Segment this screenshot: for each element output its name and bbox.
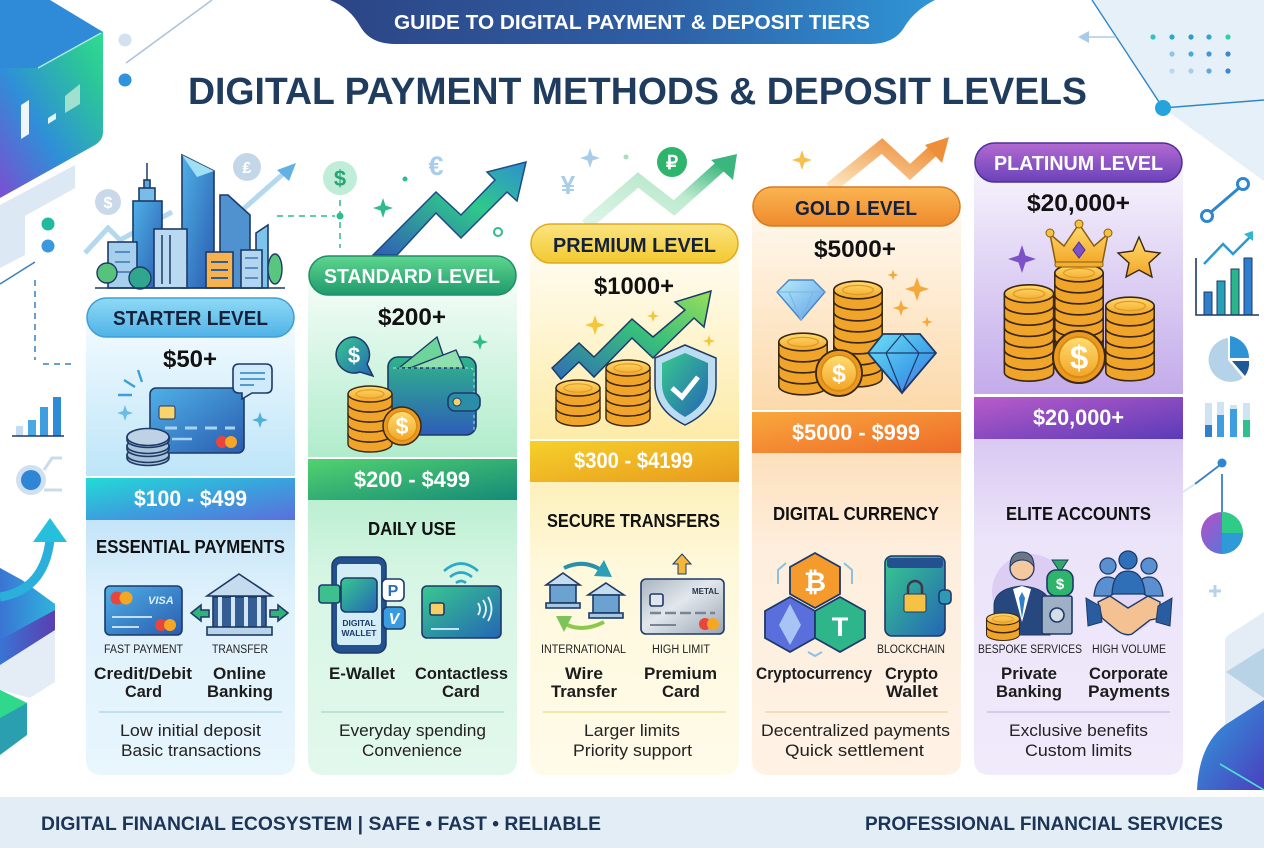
description: [1009, 722, 1148, 760]
price band: $100 - $499: [134, 486, 247, 511]
minimum deposit: $50+: [163, 346, 217, 373]
method: premium card: Premium: [644, 665, 717, 683]
method: e-wallet: E-Wallet: [329, 665, 396, 683]
heading: ESSENTIAL PAYMENTS: [96, 537, 285, 557]
price band: [752, 412, 961, 453]
method: crypto wallet: Wallet: [886, 683, 939, 701]
method: online banking: Banking: [207, 683, 273, 701]
price band: [86, 478, 295, 520]
price band: [974, 397, 1183, 439]
heading: DIGITAL CURRENCY: [773, 504, 939, 524]
icon: coins and diamonds: [777, 270, 936, 396]
icon: digital wallet phone: DIGITAL: [342, 618, 376, 628]
icon: coins and diamonds: $: [832, 360, 846, 388]
method: premium card: Card: [662, 683, 700, 701]
caption: bespoke services: BESPOKE SERVICES: [978, 644, 1082, 656]
icon: crypto wallet: [885, 556, 951, 636]
method: wire transfer: Wire: [565, 665, 603, 683]
title: DIGITAL PAYMENT METHODS & DEPOSIT LEVELS: [188, 71, 1087, 113]
description: Everyday spending: [339, 722, 486, 740]
description: [573, 722, 692, 760]
heading: DAILY USE: [368, 519, 456, 539]
price band: [308, 459, 517, 500]
caption: high limit: HIGH LIMIT: [652, 644, 710, 656]
icon: digital wallet phone: WALLET: [342, 628, 377, 638]
heading: ELITE ACCOUNTS: [1006, 504, 1151, 524]
icon: city skyline: [85, 153, 296, 289]
minimum deposit: $5000+: [814, 236, 896, 263]
description: Decentralized payments: [761, 722, 950, 740]
icon: wallet with coins: [336, 334, 488, 452]
method: wire transfer: Transfer: [551, 683, 618, 701]
method: corporate payments: Payments: [1088, 683, 1170, 701]
method: credit/debit card: Credit/Debit: [94, 665, 193, 683]
heading: SECURE TRANSFERS: [547, 511, 720, 531]
icon: rising orange arrow: [792, 137, 949, 188]
panel: standard level: [277, 151, 526, 775]
minimum deposit: $20,000+: [1027, 190, 1130, 217]
caption: transfer: TRANSFER: [212, 644, 268, 656]
method: private banking: Banking: [996, 683, 1062, 701]
description: [120, 722, 261, 760]
icon: crown, star and coin stacks: [1004, 220, 1160, 383]
icon: wire transfer banks: [546, 560, 624, 632]
icon: corporate handshake: [1086, 551, 1172, 635]
icon: city skyline: $: [104, 195, 113, 212]
icon: crown, star and coin stacks: $: [1070, 339, 1088, 376]
panel: starter level: [85, 153, 296, 775]
icon: credit card: VISA: [148, 595, 174, 607]
icon: private banker and safe: $: [1056, 576, 1065, 593]
icon: credit card: [105, 586, 182, 635]
icon: rising arrow and currency: €: [428, 151, 444, 181]
price band: $300 - $4199: [574, 448, 693, 473]
minimum deposit: $1000+: [594, 273, 674, 300]
footer bar: DIGITAL FINANCIAL ECOSYSTEM | SAFE • FAST • RELIABLE: [41, 814, 601, 835]
pill: platinum level: [975, 143, 1182, 182]
method: premium card: [644, 665, 717, 701]
icon: bank with arrows: [191, 574, 288, 635]
icon: digital wallet phone: [319, 557, 405, 653]
method: credit/debit card: Card: [125, 683, 162, 701]
method: credit/debit card: [94, 665, 193, 701]
method: contactless card: Card: [442, 683, 480, 701]
icon: metal card: [641, 554, 724, 634]
method: contactless card: [415, 665, 508, 701]
method: online banking: Online: [213, 665, 266, 683]
method: wire transfer: [551, 665, 618, 701]
header banner: GUIDE TO DIGITAL PAYMENT & DEPOSIT TIERS: [394, 12, 870, 34]
description: Larger limits: [584, 722, 680, 740]
caption: fast payment: FAST PAYMENT: [104, 644, 183, 656]
description: Priority support: [573, 742, 692, 760]
description: Quick settlement: [785, 742, 924, 760]
icon: wallet with coins: $: [348, 343, 360, 368]
caption: blockchain: BLOCKCHAIN: [877, 644, 945, 656]
icon: metal card: METAL: [692, 587, 719, 596]
icon: rising arrow and currency: ¥: [561, 170, 576, 200]
icon: wallet with coins: $: [396, 413, 409, 439]
pill: premium level: [531, 224, 738, 263]
method: online banking: [207, 665, 273, 701]
right decorations: [1078, 0, 1264, 790]
method: cryptocurrency: Cryptocurrency: [756, 665, 873, 683]
method: crypto wallet: Crypto: [885, 665, 938, 683]
method: corporate payments: Corporate: [1089, 665, 1168, 683]
left decorations: [0, 0, 212, 755]
header banner: [330, 0, 935, 44]
description: Exclusive benefits: [1009, 722, 1148, 740]
icon: crypto hexagons: T: [832, 612, 849, 642]
price band: $20,000+: [1033, 405, 1124, 430]
panel: premium level: [530, 147, 739, 775]
panel: gold level: [752, 137, 961, 775]
icon: private banker and safe: [986, 552, 1073, 640]
icon: rising arrow and currency: ₽: [666, 153, 678, 174]
icon: card with coins: [117, 364, 272, 465]
icon: rising arrow and currency: [561, 147, 737, 225]
pill: starter level: [87, 298, 294, 337]
caption: international: INTERNATIONAL: [541, 644, 627, 656]
price band: $5000 - $999: [792, 420, 920, 445]
icon: rising arrow and currency: [277, 151, 526, 255]
footer bar: [0, 797, 1264, 848]
icon: crypto hexagons: ₿: [804, 567, 826, 597]
method: crypto wallet: [885, 665, 939, 701]
pill: gold level: [753, 187, 960, 226]
minimum deposit: $200+: [378, 304, 446, 331]
caption: high volume: HIGH VOLUME: [1092, 644, 1166, 656]
method: contactless card: Contactless: [415, 665, 508, 683]
description: Basic transactions: [121, 742, 261, 760]
pill: standard level: STANDARD LEVEL: [324, 266, 500, 288]
pill: gold level: GOLD LEVEL: [795, 198, 917, 220]
icon: arrow, coins and shield: [552, 291, 716, 426]
icon: city skyline: ₤: [243, 160, 252, 177]
description: Convenience: [362, 742, 462, 760]
method: private banking: Private: [1001, 665, 1057, 683]
pill: platinum level: PLATINUM LEVEL: [994, 153, 1163, 175]
description: Custom limits: [1025, 742, 1132, 760]
pill: premium level: PREMIUM LEVEL: [553, 235, 716, 257]
price band: [530, 441, 739, 482]
icon: rising arrow and currency: $: [334, 166, 346, 191]
description: [761, 722, 950, 760]
panel: platinum level: [974, 143, 1183, 775]
icon: crypto hexagons: [765, 553, 865, 656]
description: [339, 722, 486, 760]
pill: standard level: [309, 256, 516, 295]
pill: starter level: STARTER LEVEL: [113, 308, 268, 330]
method: private banking: [996, 665, 1062, 701]
icon: contactless card: [422, 564, 501, 638]
icon: digital wallet phone: V: [389, 611, 401, 628]
price band: $200 - $499: [354, 467, 470, 492]
footer bar: PROFESSIONAL FINANCIAL SERVICES: [865, 814, 1223, 835]
method: corporate payments: [1088, 665, 1170, 701]
icon: digital wallet phone: P: [388, 583, 399, 600]
description: Low initial deposit: [120, 722, 261, 740]
